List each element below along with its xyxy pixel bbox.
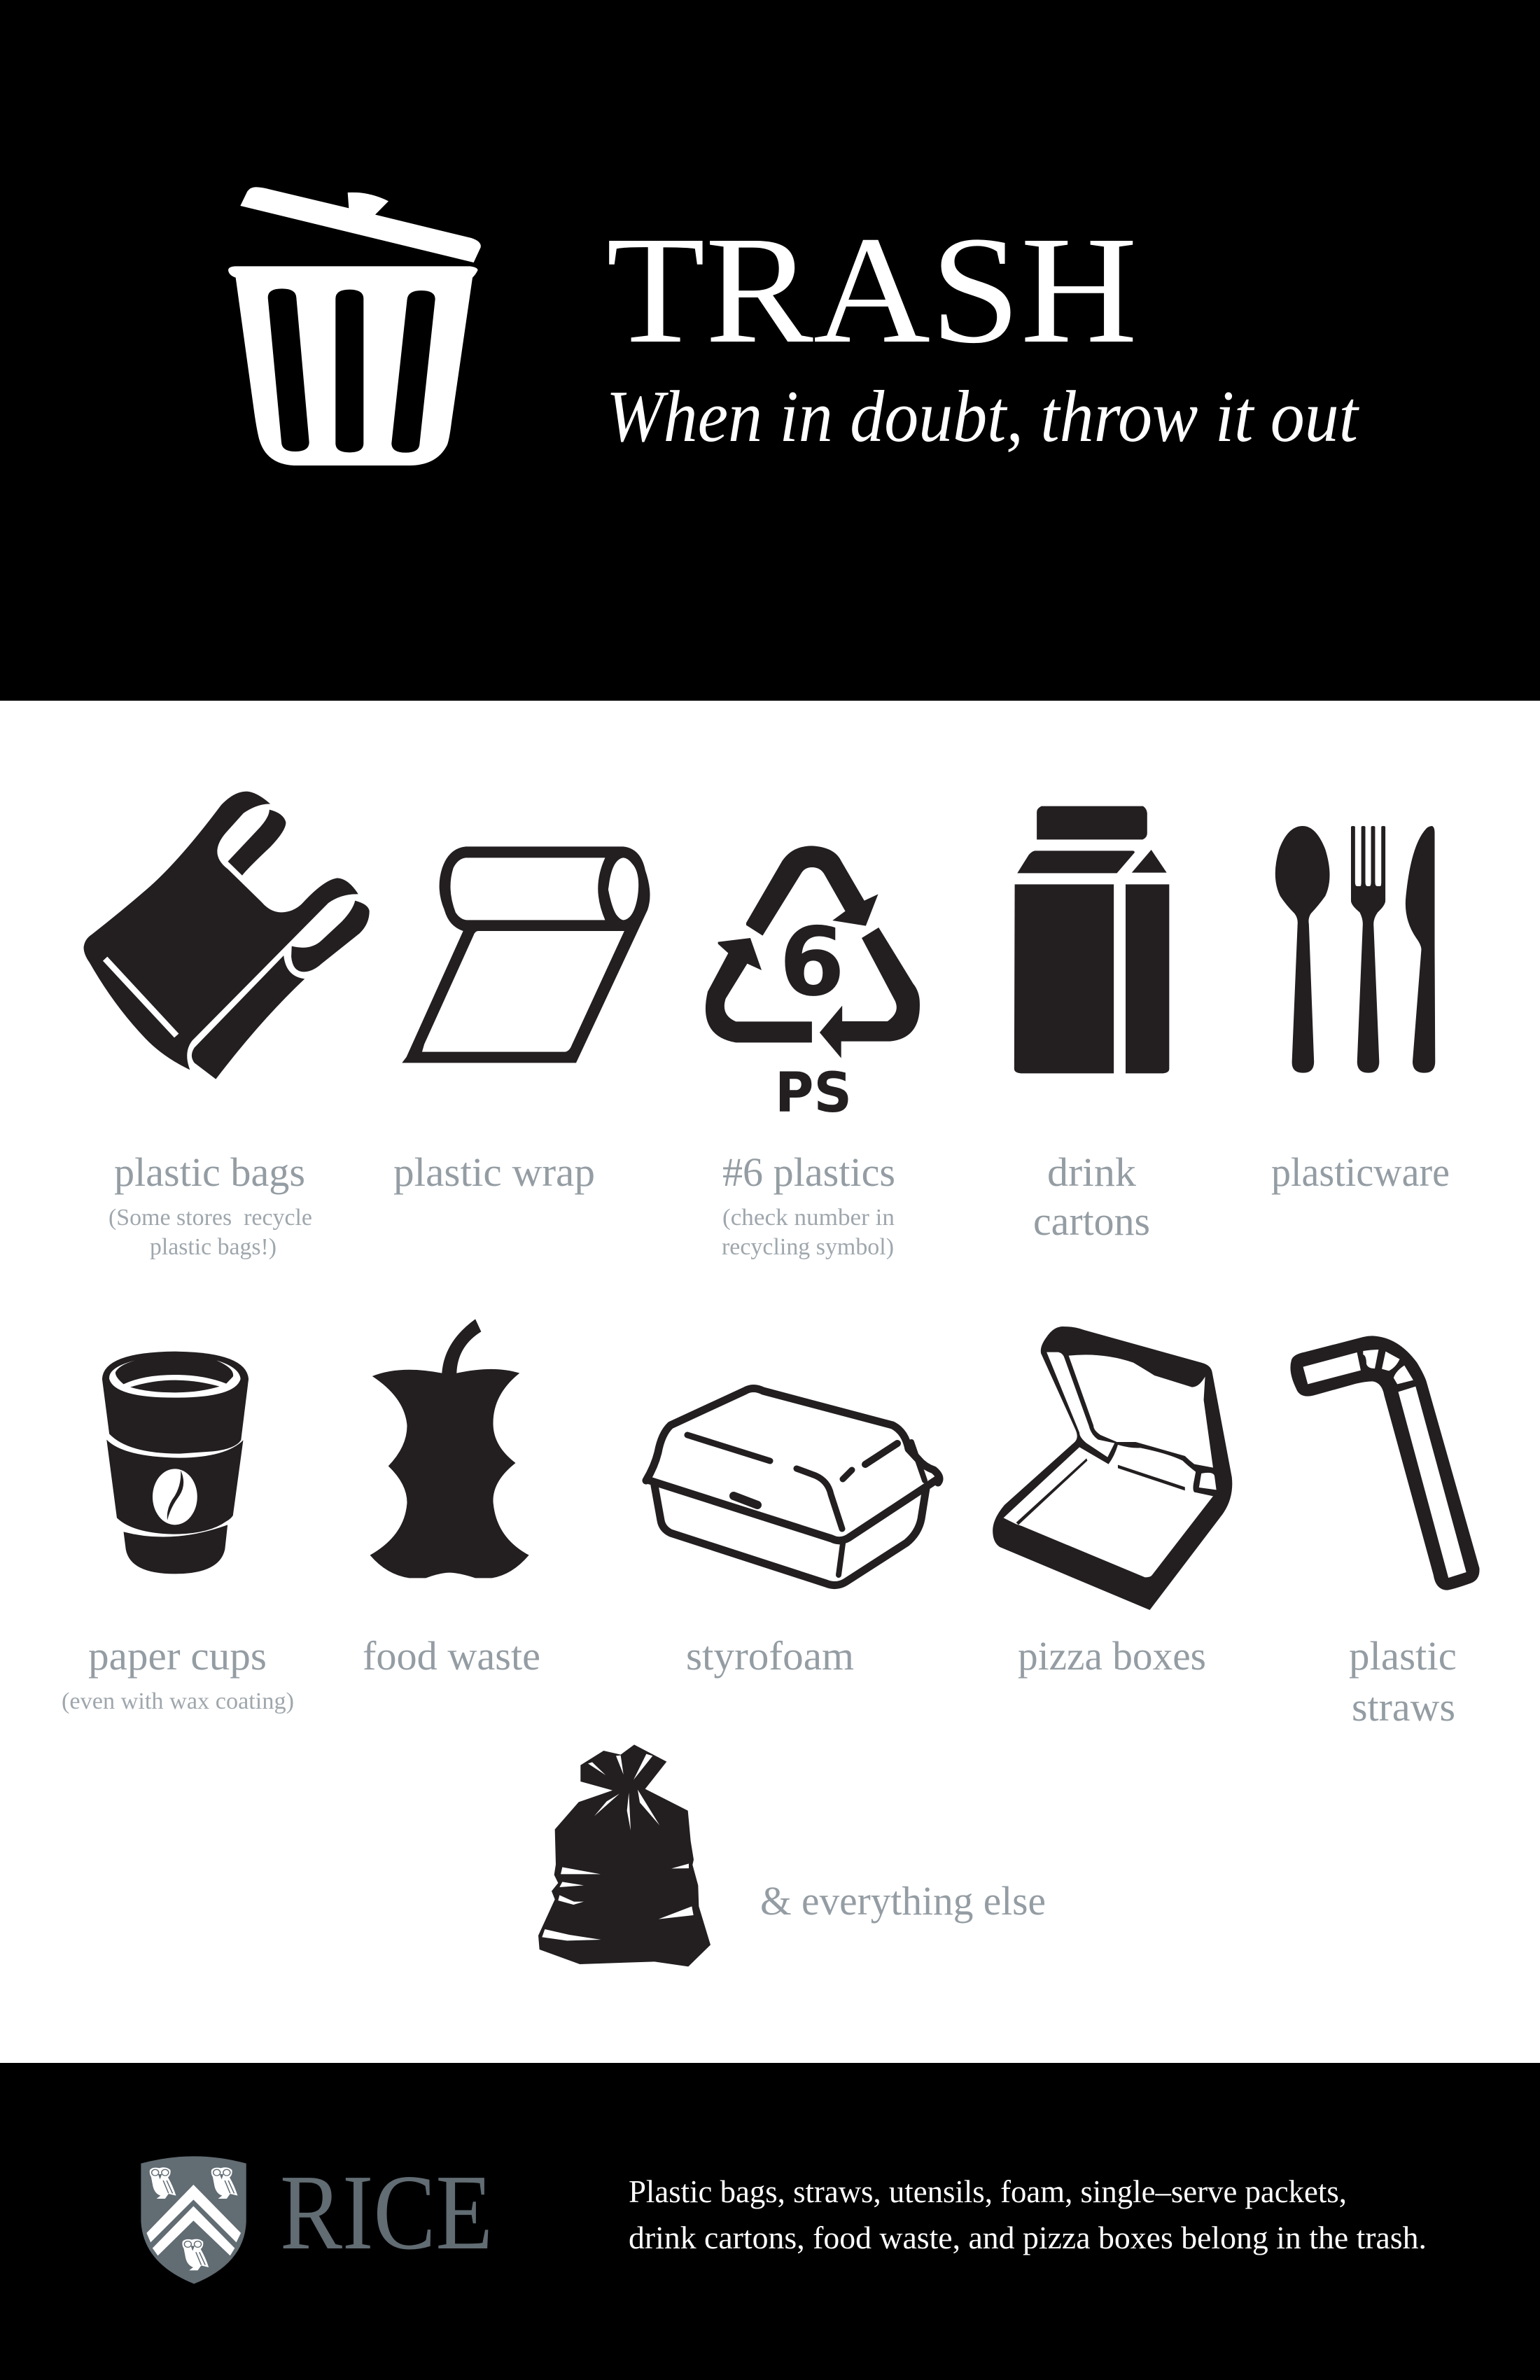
icon: plastic bag: [84, 792, 370, 1079]
label: #6 plastics: #6 plastics: [722, 1149, 895, 1195]
label: #6 plastics: [722, 1149, 895, 1260]
panel: trash items: [62, 792, 1480, 1966]
subtitle: When in doubt, throw it out: [606, 375, 1360, 457]
icon: recycling symbol 6 PS: 6: [779, 907, 845, 1017]
label: food waste: food waste: [363, 1633, 540, 1679]
label: paper cups: (even with wax coating): [62, 1688, 294, 1714]
owl: top left: [150, 2167, 176, 2199]
label: plastic bags: plastic bags!): [150, 1234, 276, 1260]
label: & everything else: & everything else: [760, 1878, 1046, 1924]
label: plasticware: plasticware: [1271, 1149, 1450, 1195]
icon: recycling symbol 6 PS: PS: [775, 1062, 852, 1125]
icon: plastic straw: [1290, 1336, 1480, 1590]
icon: plasticware: [1275, 826, 1435, 1073]
panel: footer band: [0, 2063, 1540, 2380]
footer text: drink cartons, food waste, and pizza boxes belong in the trash.: [629, 2220, 1427, 2255]
icon: trash can: [228, 187, 481, 465]
owl: top right: [211, 2167, 238, 2199]
label: plastic bags: (Some stores recycle: [108, 1205, 312, 1231]
icon: garbage bag: [538, 1744, 710, 1966]
icon: paper cup: [102, 1352, 248, 1574]
label: drink cartons: [1033, 1149, 1150, 1244]
icon: drink carton: [1014, 806, 1169, 1073]
icon: styrofoam container: [646, 1389, 939, 1586]
label: drink cartons: cartons: [1033, 1198, 1150, 1244]
panel: header band: [0, 0, 1540, 701]
title: TRASH: [606, 204, 1138, 375]
owl: bottom: [182, 2239, 209, 2270]
label: plastic wrap: plastic wrap: [393, 1149, 595, 1195]
label: plastic bags: [108, 1149, 312, 1260]
footer text: Plastic bags, straws, utensils, foam, single–serve packets,: [629, 2174, 1347, 2209]
icon: plastic wrap: [402, 846, 650, 1063]
label: plastic straws: straws: [1352, 1684, 1455, 1730]
label: plastic straws: plastic: [1349, 1633, 1457, 1679]
label: drink cartons: drink: [1047, 1149, 1136, 1195]
icon: apple core: [370, 1319, 529, 1578]
label: plastic straws: [1349, 1633, 1457, 1730]
label: plastic bags: plastic bags: [114, 1149, 305, 1195]
label: styrofoam: styrofoam: [686, 1633, 854, 1679]
label: pizza boxes: pizza boxes: [1018, 1633, 1206, 1679]
logo: RICE wordmark: RICE: [280, 2153, 493, 2272]
label: paper cups: paper cups: [88, 1633, 267, 1679]
logo: Rice shield: [141, 2156, 246, 2284]
label: #6 plastics: recycling symbol): [722, 1234, 894, 1260]
icon: recycling symbol 6 PS: [706, 846, 920, 1125]
label: #6 plastics: (check number in: [722, 1205, 895, 1231]
label: paper cups: [62, 1633, 294, 1714]
icon: pizza box: [993, 1326, 1232, 1610]
footer text: [629, 2174, 1427, 2255]
